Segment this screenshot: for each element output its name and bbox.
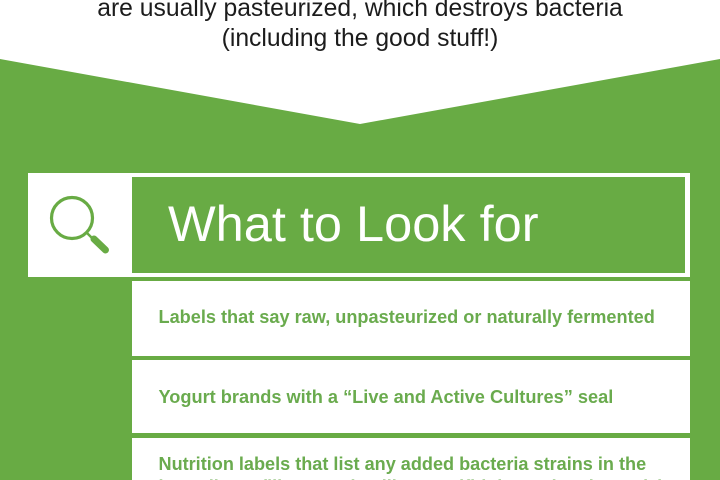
list item 3: Nutrition labels that list any added bacteria strains in the — [158, 454, 646, 474]
list item 1 — [132, 281, 690, 356]
intro text: (including the good stuff!) — [222, 25, 498, 52]
list item 3 — [132, 438, 690, 480]
intro text — [97, 0, 623, 52]
heading — [132, 177, 685, 273]
icon: magnifying glass — [50, 196, 109, 254]
list item 1: Labels that say raw, unpasteurized or naturally fermented — [158, 307, 655, 327]
heading: What to Look for — [168, 195, 539, 252]
panel: what to look for header — [28, 173, 690, 277]
list item 2: Yogurt brands with a “Live and Active Cultures” seal — [158, 387, 613, 407]
list item 2 — [132, 360, 690, 433]
